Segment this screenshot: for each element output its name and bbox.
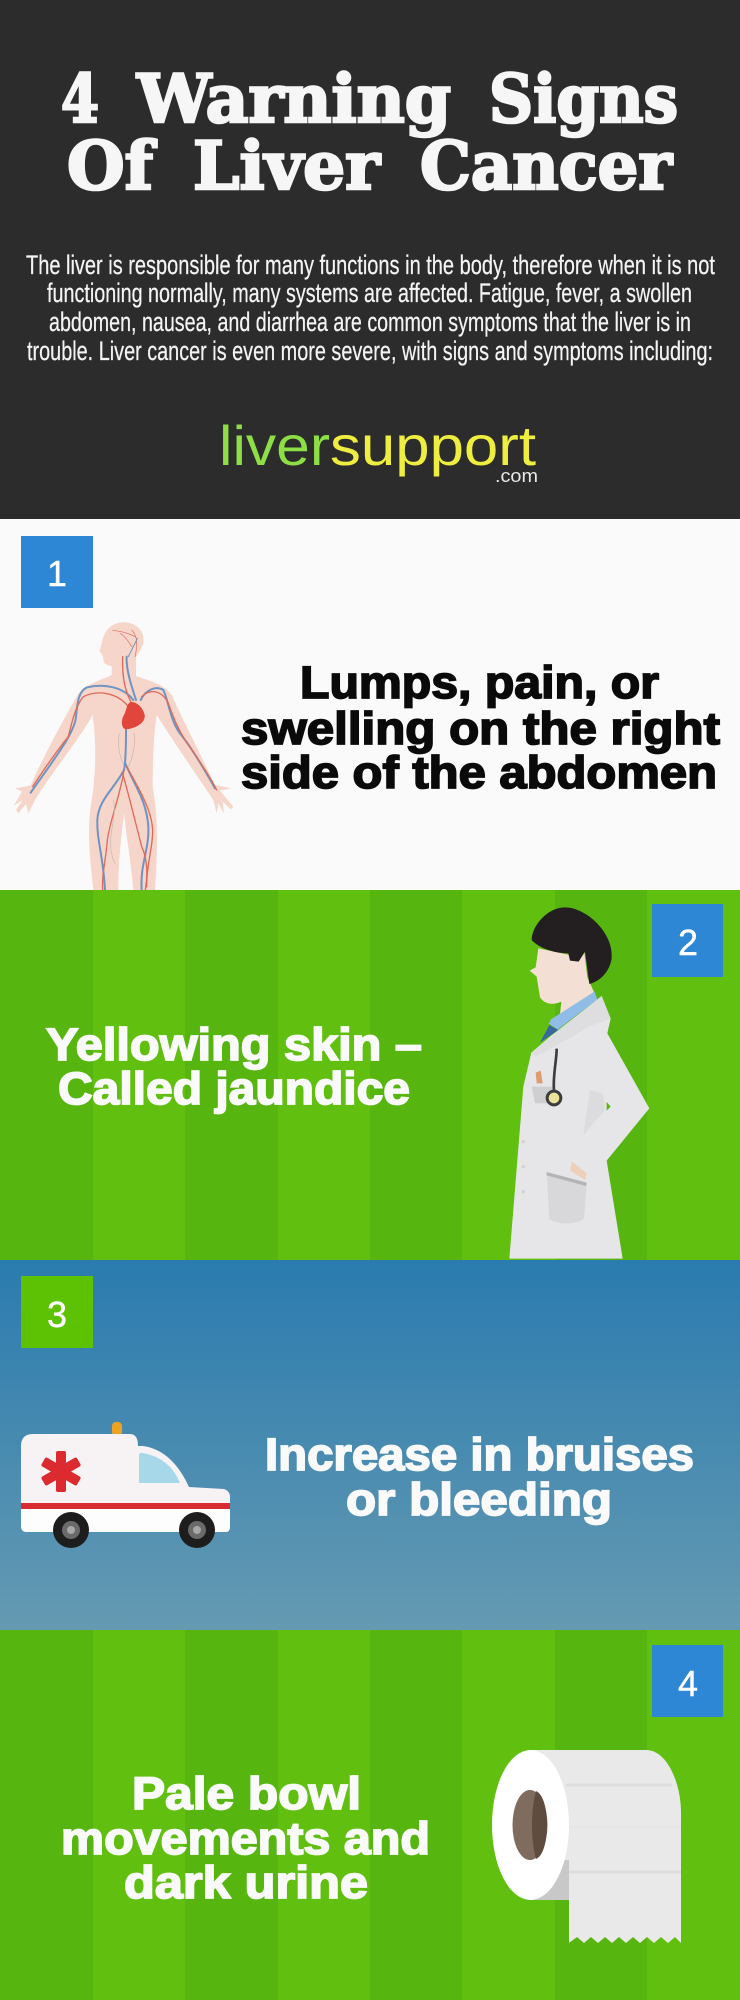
title: 4 bbox=[61, 60, 99, 138]
badge 2 bbox=[652, 904, 723, 977]
icon: human circulatory system bbox=[13, 622, 233, 890]
heading: yellowing skin: Called jaundice bbox=[58, 1063, 410, 1114]
title: Cancer bbox=[420, 127, 673, 205]
title: Warning bbox=[136, 60, 451, 138]
heading: pale bowl movements bbox=[61, 1768, 430, 1908]
logo: liversupport.com: liver bbox=[219, 414, 330, 477]
logo: liversupport.com: support bbox=[330, 414, 536, 477]
badge 4: 4 bbox=[678, 1663, 698, 1704]
panel: header bbox=[0, 0, 740, 519]
heading: pale bowl movements: dark urine bbox=[124, 1857, 368, 1908]
title bbox=[61, 60, 678, 205]
badge 3: 3 bbox=[47, 1294, 67, 1335]
heading: lumps, pain or swelling bbox=[241, 657, 720, 798]
heading: increase in bruises: or bleeding bbox=[346, 1474, 612, 1525]
heading: lumps, pain or swelling: swelling on the right bbox=[241, 703, 720, 754]
icon: ambulance bbox=[21, 1422, 230, 1548]
panel: sign 4 pale bowel movements bbox=[0, 1630, 740, 2000]
badge 4 bbox=[652, 1645, 723, 1717]
badge 1 bbox=[21, 536, 93, 608]
heading: lumps, pain or swelling: side of the abdomen bbox=[241, 747, 717, 798]
panel: sign 2 yellowing skin bbox=[0, 890, 740, 1260]
logo: liversupport.com bbox=[219, 414, 538, 486]
title: Signs bbox=[489, 60, 678, 138]
heading: lumps, pain or swelling: Lumps, pain, or bbox=[300, 657, 659, 708]
heading: pale bowl movements: Pale bowl bbox=[132, 1768, 361, 1819]
intro paragraph bbox=[26, 250, 715, 366]
heading: increase in bruises: Increase in bruises bbox=[265, 1429, 694, 1480]
badge 3 bbox=[21, 1276, 93, 1348]
icon: doctor in white coat bbox=[509, 907, 649, 1259]
heading: yellowing skin: Yellowing skin – bbox=[46, 1019, 422, 1070]
badge 1: 1 bbox=[47, 553, 67, 594]
heading: increase in bruises bbox=[265, 1429, 694, 1525]
heading: pale bowl movements: movements and bbox=[61, 1813, 430, 1864]
title: Of bbox=[67, 127, 157, 205]
logo: liversupport.com: .com bbox=[495, 466, 538, 486]
panel: sign 1 lumps bbox=[0, 519, 740, 890]
heading: yellowing skin bbox=[46, 1019, 422, 1114]
icon: toilet paper roll bbox=[492, 1750, 681, 1943]
badge 2: 2 bbox=[678, 922, 698, 963]
title: Liver bbox=[193, 127, 381, 205]
panel: sign 3 bruises bbox=[0, 1260, 740, 1630]
